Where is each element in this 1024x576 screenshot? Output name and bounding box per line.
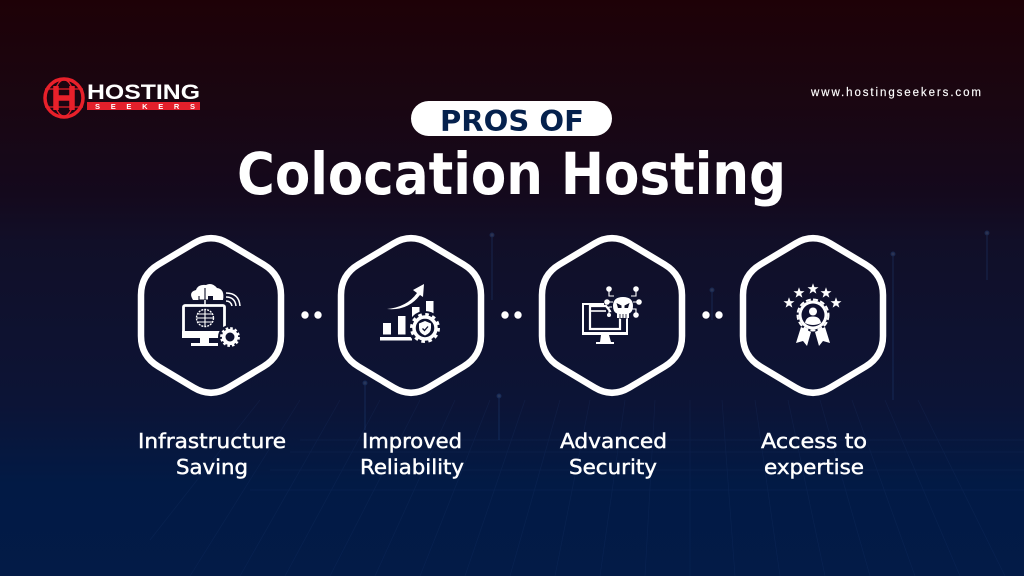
label: advanced security: Security — [569, 455, 657, 479]
label: improved reliability — [360, 429, 464, 479]
connector dots 3 — [702, 311, 723, 319]
connector dots 2 — [501, 311, 522, 319]
label: infrastructure saving: Infrastructure — [138, 429, 286, 453]
logo red tagline bar — [87, 102, 200, 110]
logo — [45, 79, 200, 117]
label: infrastructure saving: Saving — [176, 455, 248, 479]
background grid — [150, 400, 1024, 576]
label: advanced security: Advanced — [560, 429, 667, 453]
hexagon 2: improved reliability — [341, 238, 481, 393]
heading pill: PROS OF — [440, 105, 584, 138]
label: access to expertise: Access to — [761, 429, 867, 453]
decorative network pins — [363, 231, 989, 440]
heading pill — [411, 101, 612, 138]
icon: award rosette with stars — [784, 283, 842, 346]
label: access to expertise: expertise — [764, 455, 864, 479]
icon: monitor with skull and network — [582, 286, 642, 344]
connector dots 1 — [301, 311, 322, 319]
hexagon 4: access to expertise — [743, 238, 883, 393]
logo wordmark: HOSTING — [87, 81, 200, 104]
label: improved reliability: Improved — [362, 429, 462, 453]
icon: growth chart and shield gear — [380, 284, 442, 345]
label: improved reliability: Reliability — [360, 455, 464, 479]
hexagon 1: infrastructure saving — [141, 238, 281, 393]
label: access to expertise — [761, 429, 867, 479]
logo tagline: SEEKERS — [95, 102, 195, 111]
logo globe icon — [45, 79, 83, 117]
icon: cloud monitor and gear — [182, 284, 242, 349]
label: infrastructure saving — [138, 429, 286, 479]
hexagon 3: advanced security — [542, 238, 682, 393]
website url: www.hostingseekers.com — [810, 87, 981, 99]
label: advanced security — [560, 429, 667, 479]
title: Colocation Hosting — [237, 141, 786, 208]
